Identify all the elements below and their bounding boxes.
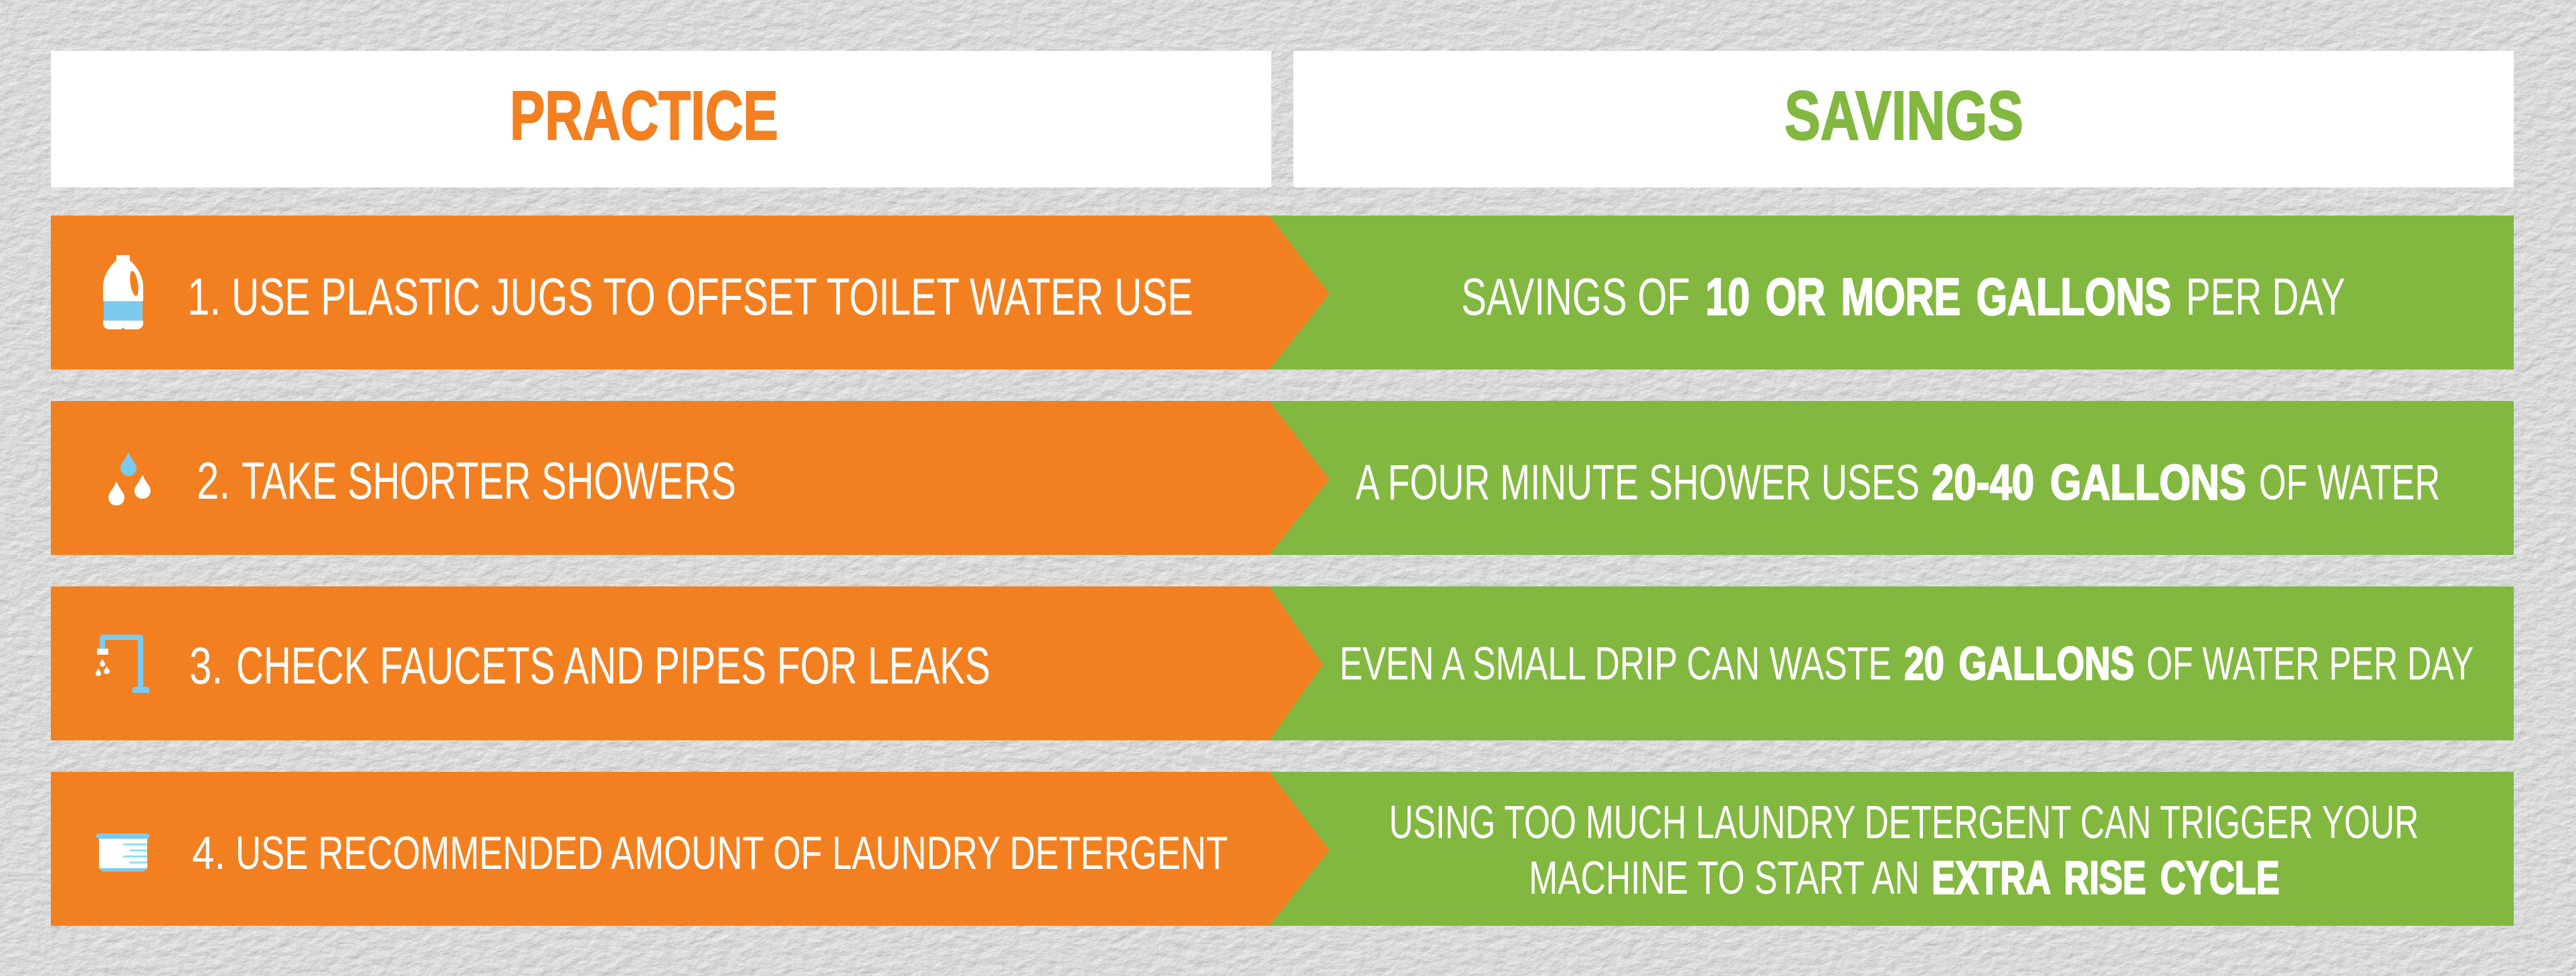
panel: row 4	[51, 772, 2514, 926]
savings band 2	[1265, 401, 2514, 555]
practice text 2	[197, 451, 736, 510]
icon: leaking faucet	[96, 635, 149, 693]
practice text 1: 1.	[187, 267, 221, 326]
savings text 3: 20 GALLONS	[1904, 637, 2134, 689]
savings text 1: SAVINGS OF	[1461, 267, 1690, 326]
practice text 4: USE RECOMMENDED AMOUNT OF LAUNDRY DETERGENT	[236, 827, 1228, 879]
savings text 2: A FOUR MINUTE SHOWER USES	[1356, 455, 1920, 510]
practice text 4: 4.	[192, 827, 225, 879]
savings text 4: MACHINE TO START AN	[1529, 851, 1920, 904]
practice text 3: CHECK FAUCETS AND PIPES FOR LEAKS	[236, 636, 990, 695]
practice text 2: 2.	[197, 451, 230, 510]
savings band 3	[1265, 586, 2514, 740]
savings text 4: EXTRA RISE CYCLE	[1932, 851, 2280, 904]
practice arrow band 3	[51, 586, 1323, 740]
icon: water drops	[108, 452, 151, 505]
savings text 1	[1461, 267, 2345, 326]
savings text 4	[1389, 796, 2419, 904]
practice arrow band 2	[51, 401, 1329, 555]
savings text 2: 20-40 GALLONS	[1932, 455, 2246, 510]
practice text 1: USE PLASTIC JUGS TO OFFSET TOILET WATER USE	[232, 267, 1193, 326]
panel: practice header	[51, 51, 1271, 187]
practice text 3: 3.	[189, 636, 223, 695]
savings text 2: OF WATER	[2259, 455, 2440, 510]
heading: practice: PRACTICE	[510, 77, 778, 154]
practice arrow band 1	[51, 216, 1329, 370]
panel: row 2	[51, 401, 2514, 555]
practice arrow band 4	[51, 772, 1329, 926]
icon: plastic jug	[103, 255, 143, 329]
savings text 1: 10 OR MORE GALLONS	[1706, 267, 2171, 326]
practice text 3	[189, 636, 990, 695]
panel: row 3	[51, 586, 2514, 740]
panel: row 1	[51, 216, 2514, 370]
savings text 3	[1340, 637, 2474, 689]
savings text 1: PER DAY	[2186, 267, 2345, 326]
savings band 4	[1265, 772, 2514, 926]
practice text 2: TAKE SHORTER SHOWERS	[242, 451, 736, 510]
panel: savings header	[1293, 51, 2514, 187]
savings band 1	[1265, 216, 2514, 370]
savings text 3: EVEN A SMALL DRIP CAN WASTE	[1340, 637, 1892, 689]
heading: savings: SAVINGS	[1784, 77, 2023, 154]
icon: detergent container	[96, 833, 150, 872]
